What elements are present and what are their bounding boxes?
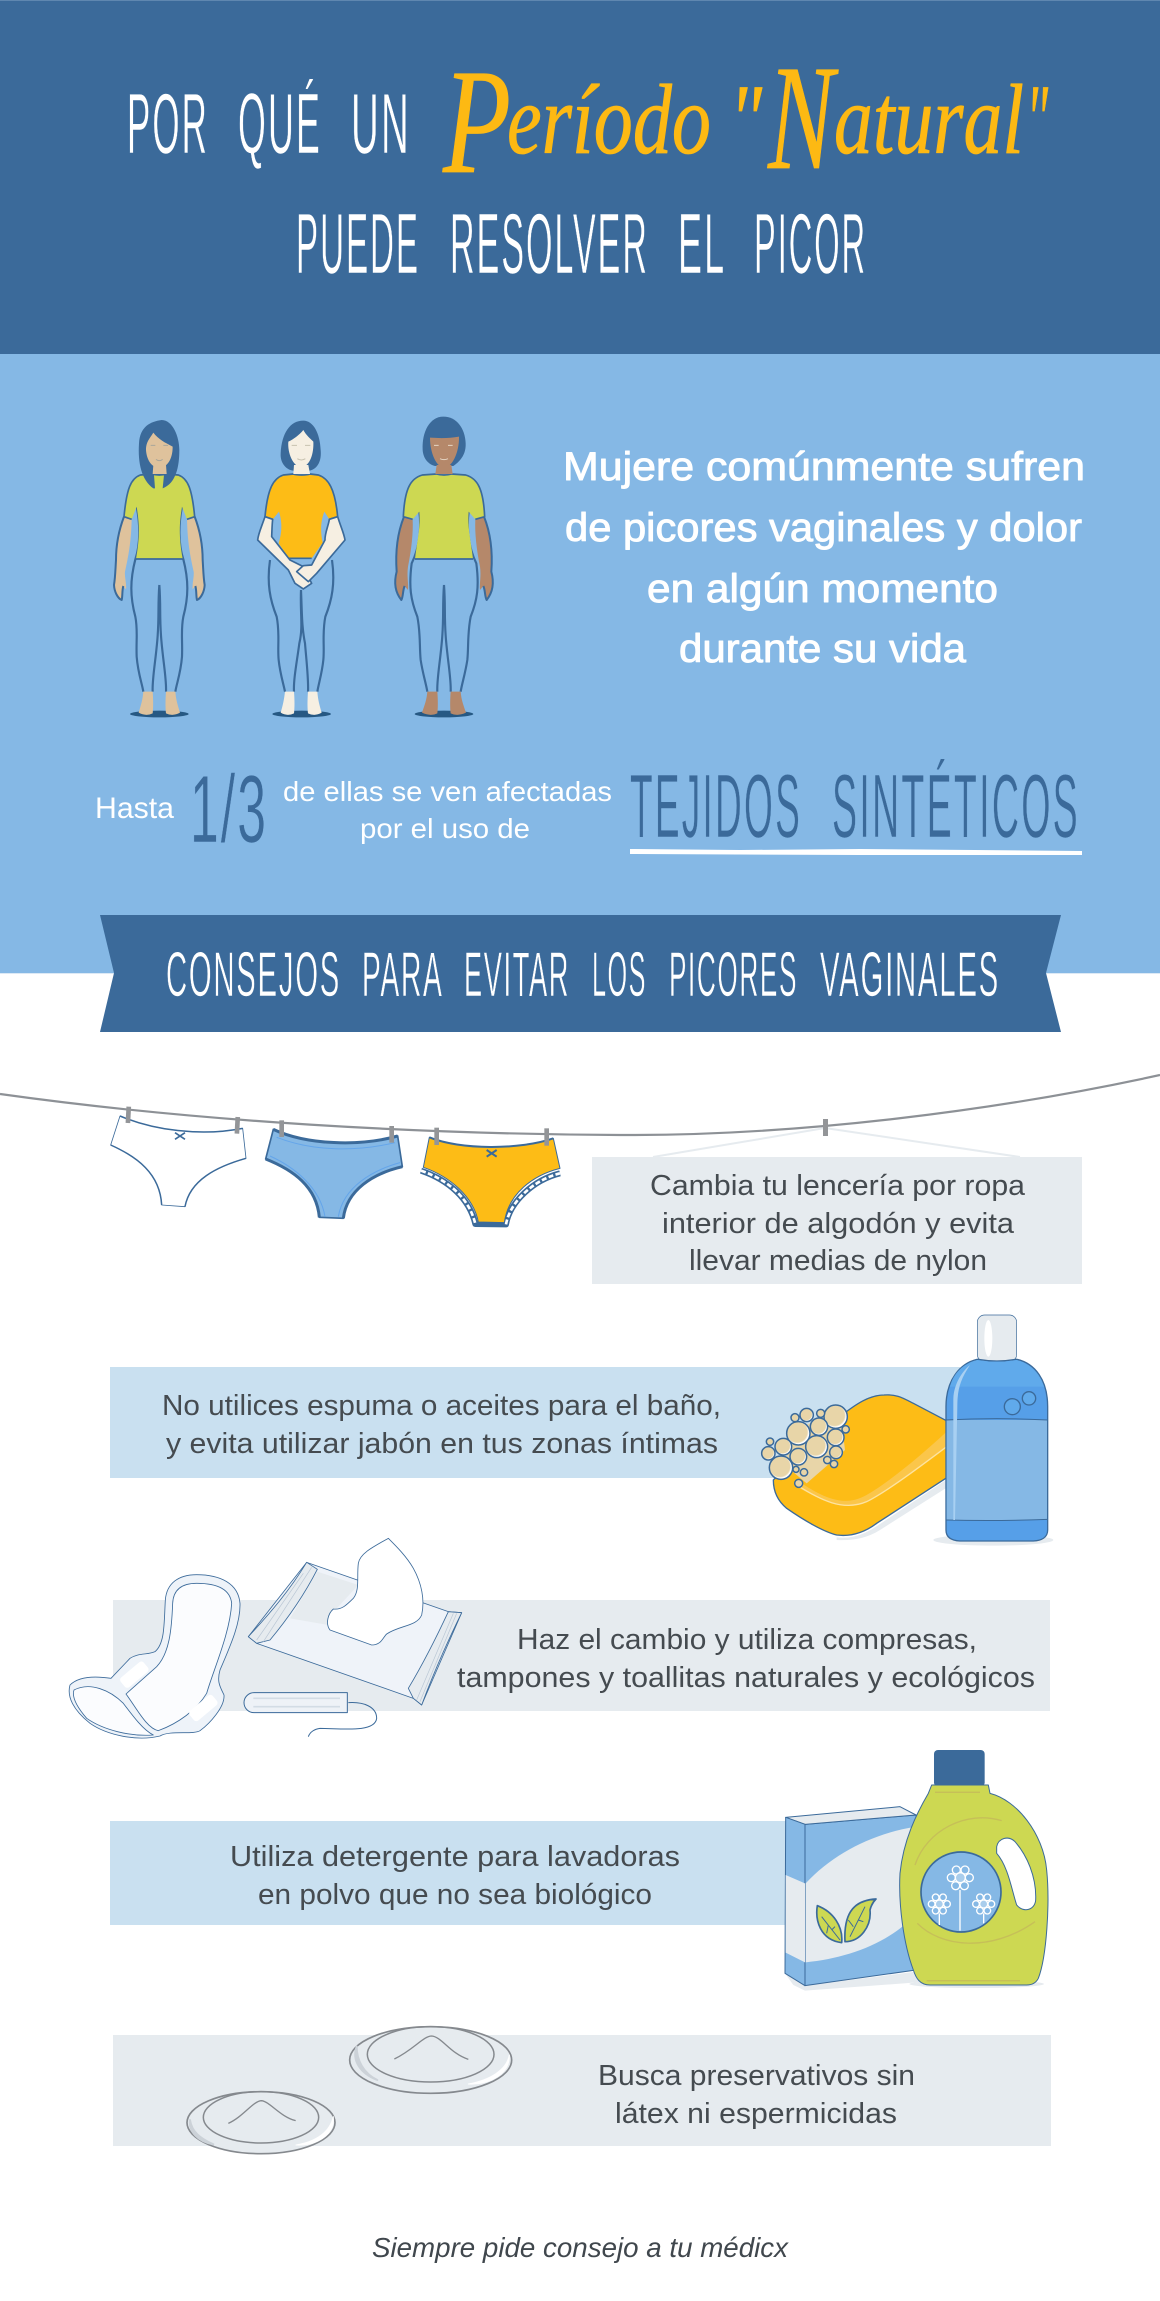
- title: P: [442, 39, 511, 205]
- icon: soap and bottle: [762, 1315, 1053, 1546]
- title: UN: [351, 77, 411, 172]
- title: PUEDE: [296, 197, 420, 292]
- title: atural: [834, 64, 1024, 175]
- footer note: Siempre pide consejo a tu médicx: [372, 2232, 789, 2263]
- panel: tip 4 text: Utiliza detergente para lavadoras: [230, 1841, 680, 1873]
- soap foam: [762, 1405, 849, 1487]
- panel: tip 4 text: [110, 1821, 800, 1925]
- panel: tip 5 text: Busca preservativos sin: [598, 2060, 915, 2092]
- panel: tip 5 text: [113, 2035, 1051, 2146]
- large condom: [350, 2027, 512, 2093]
- clothesline: [0, 1075, 1160, 1157]
- panel: tip 2 text: [110, 1367, 960, 1478]
- highlight: synthetic fabrics: TEJIDOS: [630, 757, 802, 857]
- blue bottle: [933, 1315, 1053, 1546]
- figure: woman with long hair: [114, 420, 205, 717]
- banner: [100, 915, 1061, 1032]
- yellow lace briefs: [421, 1137, 560, 1224]
- banner: PICORES: [669, 940, 798, 1010]
- panel: tip 3 text: [113, 1600, 1050, 1711]
- banner: CONSEJOS: [166, 940, 341, 1010]
- panel: tip 2 text: No utilices espuma o aceites para el baño,: [162, 1390, 721, 1422]
- statistic: one third: [95, 756, 612, 863]
- title: ": [1026, 64, 1049, 175]
- panel: tip 3 text: Haz el cambio y utiliza compresas,: [517, 1624, 977, 1656]
- tip 4: detergent: [110, 1750, 1048, 1991]
- banner: LOS: [592, 940, 647, 1010]
- tip 2: soap: [110, 1315, 1053, 1546]
- statistic: one third: Hasta: [95, 792, 174, 825]
- panel: tip 1 text: [592, 1157, 1082, 1284]
- panel: intro: [0, 354, 1160, 974]
- white briefs: [111, 1116, 246, 1207]
- panel: tip 5 text: látex ni espermicidas: [615, 2098, 897, 2130]
- tip 3: sanitary products: [69, 1538, 1050, 1738]
- title: PICOR: [754, 197, 867, 292]
- panel: tip 1 text: Cambia tu lencería por ropa: [650, 1170, 1026, 1202]
- statistic: one third: 1/3: [190, 756, 268, 863]
- statistic: one third: de ellas se ven afectadas: [283, 776, 612, 807]
- title: eríodo: [507, 64, 711, 175]
- statistic: one third: por el uso de: [360, 813, 530, 844]
- icon: underwear on the line: [111, 1107, 560, 1224]
- figure: woman with hands crossed: [258, 421, 345, 717]
- icon: condoms: [187, 2027, 512, 2154]
- banner: PARA: [362, 940, 442, 1010]
- title: POR: [127, 77, 209, 172]
- small condom: [187, 2092, 335, 2154]
- figure: woman with short hair: [395, 417, 493, 717]
- panel: tip 3 text: tampones y toallitas naturales y ecológicos: [457, 1662, 1035, 1694]
- clothes pegs: [126, 1107, 549, 1146]
- main statement: [563, 445, 1085, 671]
- panel: tip 1 text: llevar medias de nylon: [689, 1245, 987, 1277]
- main statement: durante su vida: [679, 627, 967, 671]
- panel: tip 4 text: en polvo que no sea biológico: [258, 1879, 652, 1911]
- tip 1: underwear: [0, 1075, 1160, 1284]
- main statement: Mujere comúnmente sufren: [563, 445, 1085, 489]
- panel: header: [0, 0, 1160, 354]
- tip 5: condoms: [113, 2027, 1051, 2154]
- powder box: [785, 1807, 927, 1991]
- soap bar: [773, 1395, 948, 1540]
- illustration: three women: [114, 417, 493, 717]
- title: N: [767, 35, 839, 201]
- flowers: [928, 1866, 995, 1931]
- main statement: en algún momento: [647, 567, 998, 611]
- icon: detergent box and bottle: [785, 1750, 1048, 1991]
- banner: EVITAR: [464, 940, 570, 1010]
- title: QUÉ: [238, 77, 322, 172]
- title: RESOLVER: [450, 197, 649, 292]
- icon: tampon: [244, 1693, 377, 1737]
- main statement: de picores vaginales y dolor: [565, 506, 1082, 550]
- title: [127, 35, 1049, 292]
- panel: tip 2 text: y evita utilizar jabón en tus zonas íntimas: [166, 1428, 718, 1460]
- blue briefs: [266, 1129, 402, 1218]
- panel: tip 1 text: interior de algodón y evita: [662, 1208, 1015, 1240]
- title: EL: [678, 197, 725, 292]
- detergent bottle: [900, 1750, 1048, 1988]
- title: ": [729, 64, 763, 175]
- icon: sanitary pad: [69, 1575, 240, 1738]
- icon: wipes pack: [248, 1538, 462, 1705]
